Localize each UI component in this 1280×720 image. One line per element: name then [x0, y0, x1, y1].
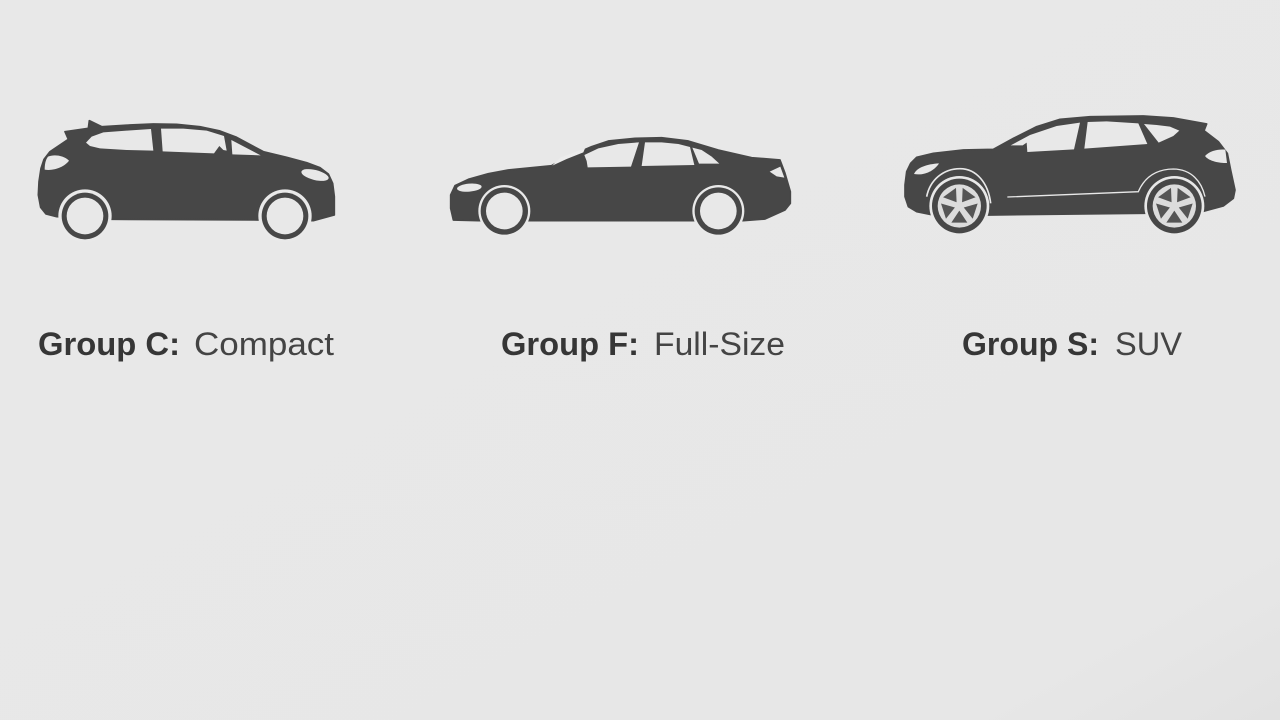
icon: SUV	[905, 116, 1235, 236]
front wheel	[692, 185, 744, 237]
label: Group F Full-Size	[501, 326, 785, 362]
label: Group S SUV	[962, 326, 1183, 362]
label: Group C Compact: Compact	[194, 326, 334, 362]
icon: compact car	[38, 121, 334, 243]
label: Group F Full-Size: Group F:	[501, 326, 639, 362]
rear wheel	[478, 185, 530, 237]
body trim line	[1007, 169, 1205, 197]
icon: full-size sedan	[451, 138, 790, 237]
label: Group S SUV: SUV	[1115, 326, 1183, 362]
rear wheel	[58, 189, 112, 243]
left wheel	[929, 176, 989, 236]
label: Group C Compact	[38, 326, 334, 362]
label: Group S SUV: Group S:	[962, 326, 1099, 362]
label: Group C Compact: Group C:	[38, 326, 180, 362]
right wheel	[1144, 176, 1204, 236]
front wheel	[258, 189, 312, 243]
label: Group F Full-Size: Full-Size	[654, 326, 785, 362]
